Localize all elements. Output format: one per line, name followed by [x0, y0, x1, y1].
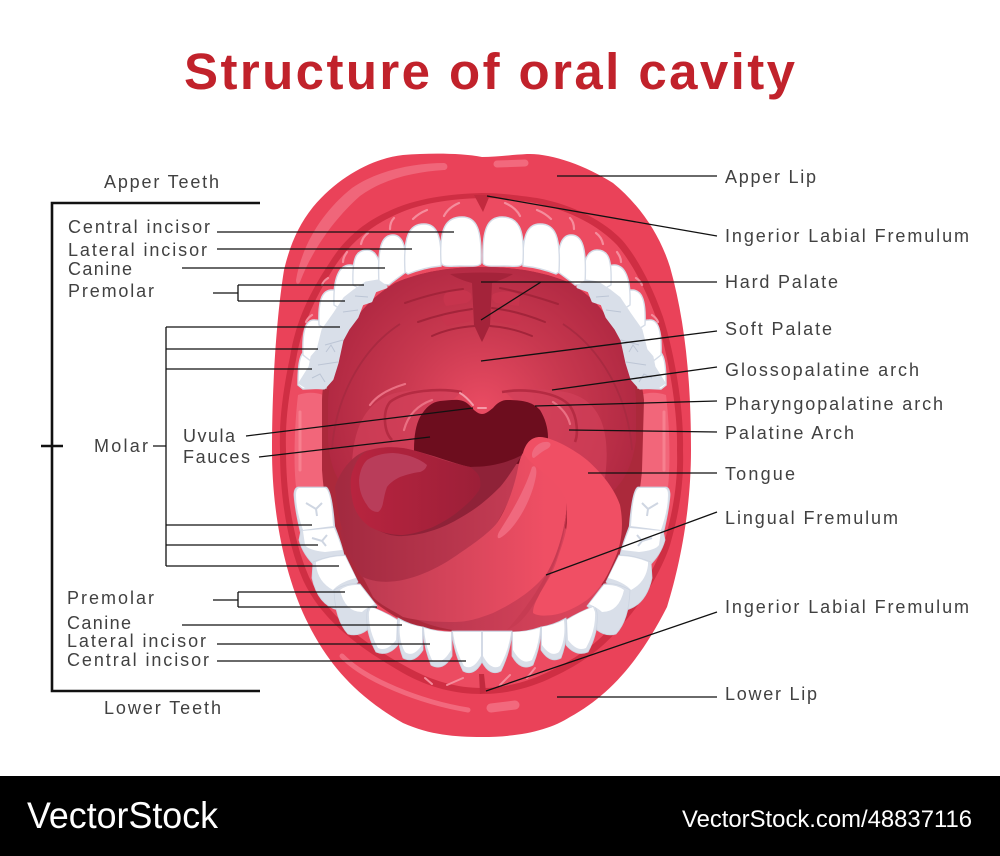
rugae	[442, 290, 522, 326]
lips	[272, 154, 691, 737]
right labels: Ingerior Labial Fremulum	[725, 226, 969, 246]
footer bar	[0, 776, 1000, 856]
inner lip shadow band	[280, 193, 683, 694]
tongue roll highlight	[359, 453, 427, 512]
cheek pads	[295, 393, 325, 487]
fauces	[414, 400, 548, 475]
right labels: Palatine Arch	[725, 423, 854, 443]
right labels: Tongue	[725, 464, 795, 484]
right labels: Apper Lip	[725, 167, 816, 187]
left labels: Lower Teeth	[104, 698, 221, 718]
right labels: Lingual Fremulum	[725, 508, 898, 528]
teeth	[298, 217, 481, 389]
bracket: teeth	[41, 203, 260, 691]
palatine arch left	[352, 389, 462, 480]
glossopalatine arch	[332, 324, 632, 450]
left labels: Canine	[67, 613, 131, 633]
tongue tip	[523, 437, 622, 616]
footer bar: VectorStock	[27, 795, 218, 836]
right labels: Soft Palate	[725, 319, 832, 339]
frenulum upper	[474, 195, 490, 212]
tongue highlights	[498, 466, 536, 538]
left labels: Lateral incisor	[67, 631, 206, 651]
palatine arch right	[505, 389, 607, 478]
footer bar: VectorStock.com/48837116	[682, 806, 972, 833]
left labels: Central incisor	[68, 217, 210, 237]
frenulum lower	[479, 674, 486, 694]
pharyngopalatine curves	[385, 390, 577, 442]
left labels: Uvula	[183, 426, 236, 446]
left labels: Canine	[68, 259, 132, 279]
left labels	[67, 172, 250, 718]
leader lines right	[481, 176, 717, 697]
left labels: Central incisor	[67, 650, 209, 670]
lower gum highlights	[425, 648, 562, 685]
palate median raphe	[450, 272, 513, 342]
title: Structure of oral cavity	[184, 43, 796, 100]
lingual frenulum crease	[507, 503, 567, 630]
tongue under-layer	[340, 520, 605, 632]
gum highlights	[306, 203, 459, 322]
palate	[328, 267, 636, 500]
right labels: Ingerior Labial Fremulum	[725, 597, 969, 617]
gums	[286, 198, 677, 688]
leader lines left	[153, 232, 473, 661]
left labels: Apper Teeth	[104, 172, 219, 192]
left labels: Lateral incisor	[68, 240, 207, 260]
right labels: Glossopalatine arch	[725, 360, 919, 380]
right labels: Pharyngopalatine arch	[725, 394, 943, 414]
upper lip highlight	[296, 163, 447, 284]
tongue dark body	[335, 448, 530, 582]
lower lip highlight	[342, 656, 468, 710]
illustration: open mouth	[272, 154, 691, 737]
left labels: Fauces	[183, 447, 250, 467]
tongue back roll	[351, 447, 480, 535]
tongue shade behind roll	[357, 455, 522, 536]
cavity shadow	[322, 267, 644, 634]
tongue main body	[363, 453, 580, 622]
left labels: Molar	[94, 436, 148, 456]
uvula highlight	[460, 393, 486, 408]
left labels: Premolar	[67, 588, 154, 608]
right labels: Hard Palate	[725, 272, 838, 292]
right labels: Lower Lip	[725, 684, 817, 704]
arch highlights	[370, 384, 570, 430]
right labels	[725, 167, 969, 704]
left labels: Premolar	[68, 281, 154, 301]
